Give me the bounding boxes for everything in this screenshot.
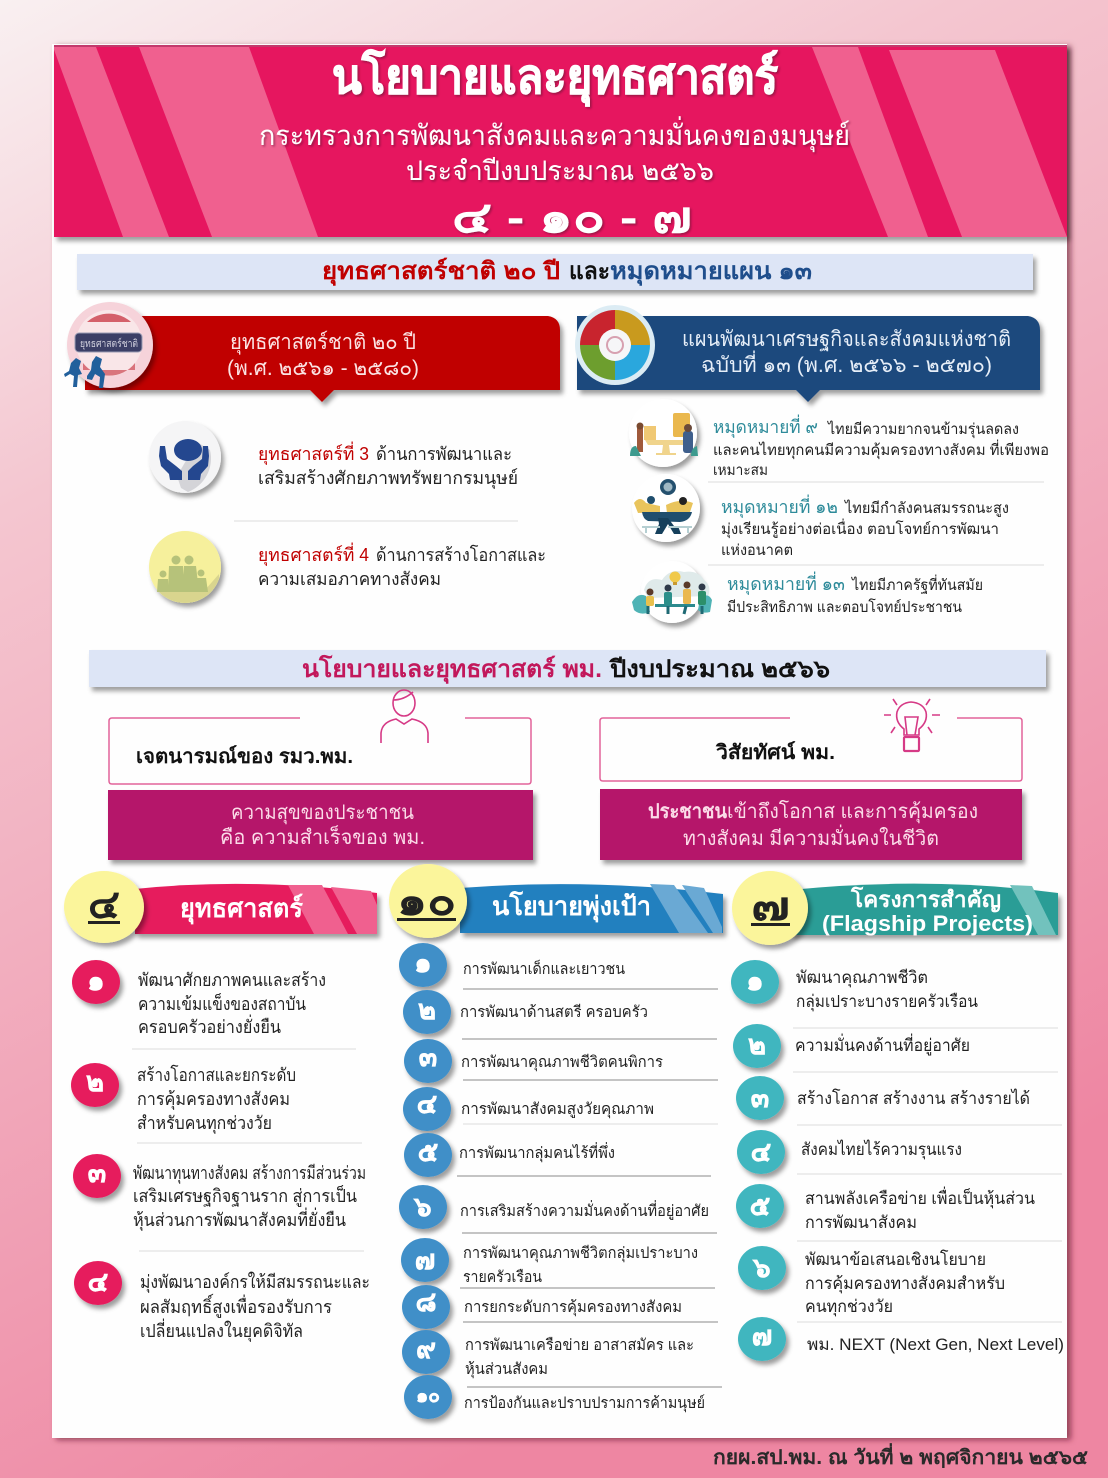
red card: 20-year strategy bbox=[64, 302, 560, 402]
project item 5: สานพลังเครือข่าย เพื่อเป็นหุ้นส่วน bbox=[805, 1186, 1035, 1209]
goal 13: ไทยมีภาครัฐที่ทันสมัย bbox=[851, 574, 983, 594]
icon: team meeting bbox=[632, 561, 712, 623]
policy item 2: ๒ bbox=[418, 995, 436, 1025]
strategy 4: ด้านการสร้างโอกาสและ bbox=[376, 544, 546, 565]
project item 4: สังคมไทยไร้ความรุนแรง bbox=[801, 1139, 962, 1160]
box: vision statement: ประชาชน bbox=[648, 801, 727, 823]
list: target policies bbox=[399, 943, 722, 1419]
strategy 3: เสริมสร้างศักยภาพทรัพยากรมนุษย์ bbox=[258, 468, 518, 489]
icon: puzzle wheel bbox=[575, 305, 655, 385]
goal 9 bbox=[629, 399, 1049, 479]
policy item 4 bbox=[403, 1087, 654, 1131]
policy item 9: ๙ bbox=[416, 1334, 436, 1364]
goal 12: หมุดหมายที่ ๑๒ bbox=[721, 494, 838, 518]
policy item 8: การยกระดับการคุ้มครองทางสังคม bbox=[464, 1299, 682, 1317]
strategy item 2: การคุ้มครองทางสังคม bbox=[137, 1089, 290, 1110]
heading: 7 flagship projects: (Flagship Projects) bbox=[822, 911, 1033, 936]
strategy item 3: พัฒนาทุนทางสังคม สร้างการมีส่วนร่วม bbox=[133, 1163, 366, 1184]
policy item 10 bbox=[404, 1375, 705, 1419]
project item 2: ๒ bbox=[748, 1030, 766, 1060]
blue card: national plan 13: ฉบับที่ ๑๓ (พ.ศ. ๒๕๖๖ - ๒๕๗๐) bbox=[701, 350, 992, 377]
box: happiness statement bbox=[108, 790, 533, 860]
strategy item 4: มุ่งพัฒนาองค์กรให้มีสมรรถนะและ bbox=[140, 1271, 370, 1293]
policy item 1: ๑ bbox=[414, 948, 432, 978]
project item 6: คนทุกช่วงวัย bbox=[805, 1297, 893, 1317]
policy item 4: ๔ bbox=[417, 1089, 437, 1119]
heading: 4 strategies bbox=[64, 871, 377, 943]
panel: ministry vision: วิสัยทัศน์ พม. bbox=[715, 741, 835, 764]
section band: ministry policy: ปีงบประมาณ ๒๕๖๖ bbox=[609, 656, 830, 683]
strategy 4: ยุทธศาสตร์ที่ 4 bbox=[258, 542, 369, 566]
strategy item 4 bbox=[74, 1261, 370, 1342]
panel: minister intent: เจตนารมณ์ของ รมว.พม. bbox=[136, 745, 353, 768]
policy item 7: การพัฒนาคุณภาพชีวิตกลุ่มเปราะบาง bbox=[463, 1245, 698, 1263]
goal 9: เหมาะสม bbox=[713, 462, 768, 479]
strategy item 4: เปลี่ยนแปลงในยุคดิจิทัล bbox=[140, 1318, 303, 1342]
policy item 7 bbox=[401, 1238, 698, 1286]
strategy 4 bbox=[149, 531, 546, 604]
icon: person bbox=[381, 690, 428, 743]
headline numbers: ๔ - ๑๐ - ๗ bbox=[452, 193, 692, 242]
project item 5 bbox=[736, 1184, 1035, 1232]
goal 9: และคนไทยทุกคนมีความคุ้มครองทางสังคม ที่เพียงพอ bbox=[713, 439, 1049, 460]
section band: national strategy: และ bbox=[569, 258, 610, 285]
strategy item 1: ๑ bbox=[87, 966, 105, 996]
subtitle line 1: กระทรวงการพัฒนาสังคมและความมั่นคงของมนุษย์ bbox=[259, 116, 850, 153]
policy item 9 bbox=[402, 1330, 694, 1379]
section band: national strategy: หมุดหมายแผน ๑๓ bbox=[610, 258, 812, 287]
strategy 3: ด้านการพัฒนาและ bbox=[376, 444, 512, 464]
policy item 9: หุ้นส่วนสังคม bbox=[465, 1361, 548, 1379]
project item 6: พัฒนาข้อเสนอเชิงนโยบาย bbox=[805, 1249, 986, 1269]
goal 9: ไทยมีความยากจนข้ามรุ่นลดลง bbox=[827, 420, 1019, 439]
list: flagship projects bbox=[731, 960, 1064, 1361]
strategy 4: ความเสมอภาคทางสังคม bbox=[258, 569, 441, 589]
strategy item 3 bbox=[73, 1154, 366, 1231]
project item 5: ๕ bbox=[750, 1191, 770, 1221]
project item 7: ๗ bbox=[752, 1321, 772, 1351]
title: นโยบายและยุทธศาสตร์ bbox=[332, 48, 778, 107]
policy item 8 bbox=[402, 1285, 682, 1329]
strategy item 2: สร้างโอกาสและยกระดับ bbox=[137, 1064, 296, 1085]
policy item 5 bbox=[404, 1133, 615, 1177]
icon: light bulb bbox=[884, 699, 940, 751]
section band: national strategy bbox=[77, 254, 1033, 290]
project item 3: ๓ bbox=[751, 1083, 769, 1113]
strategy item 3: หุ้นส่วนการพัฒนาสังคมที่ยั่งยืน bbox=[133, 1207, 346, 1231]
strategy item 1: ครอบครัวอย่างยั่งยืน bbox=[138, 1014, 281, 1037]
goal 9: หมุดหมายที่ ๙ bbox=[713, 414, 818, 438]
project item 6: ๖ bbox=[752, 1253, 771, 1283]
policy item 10: การป้องกันและปราบปรามการค้ามนุษย์ bbox=[464, 1394, 705, 1413]
policy item 4: การพัฒนาสังคมสูงวัยคุณภาพ bbox=[461, 1101, 654, 1119]
project item 6: การคุ้มครองทางสังคมสำหรับ bbox=[805, 1274, 1005, 1294]
icon: hands holding bbox=[149, 421, 221, 493]
project item 4: ๔ bbox=[751, 1137, 771, 1167]
strategy item 1: ความเข้มแข็งของสถาบัน bbox=[138, 992, 306, 1014]
heading: 7 flagship projects: ๗ bbox=[751, 885, 790, 929]
policy item 6: ๖ bbox=[413, 1192, 432, 1222]
section band: ministry policy: นโยบายและยุทธศาสตร์ พม. bbox=[302, 654, 602, 685]
policy item 5: ๕ bbox=[418, 1137, 438, 1167]
project item 7: พม. NEXT (Next Gen, Next Level) bbox=[807, 1335, 1064, 1354]
strategy 3 bbox=[149, 421, 518, 493]
panel: minister intent bbox=[109, 690, 531, 784]
list: strategies bbox=[71, 960, 370, 1342]
heading: 4 strategies: ยุทธศาสตร์ bbox=[180, 893, 303, 925]
policy item 1: การพัฒนาเด็กและเยาวชน bbox=[463, 959, 625, 978]
header banner bbox=[53, 45, 1067, 242]
red card: 20-year strategy: ยุทธศาสตร์ชาติ ๒๐ ปี bbox=[230, 330, 416, 355]
icon: learners with clock bbox=[632, 474, 700, 542]
policy item 2 bbox=[403, 990, 648, 1034]
strategy item 2: ๒ bbox=[86, 1067, 104, 1097]
goal 12: แห่งอนาคต bbox=[721, 542, 793, 559]
policy item 6: การเสริมสร้างความมั่นคงด้านที่อยู่อาศัย bbox=[460, 1200, 709, 1221]
strategy item 4: ๔ bbox=[88, 1267, 108, 1297]
goal 12: ไทยมีกำลังคนสมรรถนะสูง bbox=[844, 499, 1009, 517]
project item 4 bbox=[737, 1130, 962, 1174]
icon: Thai flag badge: ยุทธศาสตร์ชาติ bbox=[80, 337, 138, 350]
project item 1: กลุ่มเปราะบางรายครัวเรือน bbox=[796, 992, 978, 1012]
project item 3: สร้างโอกาส สร้างงาน สร้างรายได้ bbox=[797, 1088, 1030, 1108]
panel: ministry vision bbox=[600, 699, 1022, 781]
policy item 10: ๑๐ bbox=[416, 1386, 440, 1407]
icon: balance and coins bbox=[629, 399, 698, 467]
goal 13 bbox=[632, 561, 983, 623]
policy item 1 bbox=[399, 943, 625, 987]
goal 12 bbox=[632, 474, 1009, 559]
policy item 8: ๘ bbox=[416, 1287, 436, 1317]
box: happiness statement: ความสุขของประชาชน bbox=[231, 802, 414, 825]
heading: 7 flagship projects: โครงการสำคัญ bbox=[850, 886, 1001, 913]
goal 13: หมุดหมายที่ ๑๓ bbox=[727, 571, 845, 595]
policy item 7: ๗ bbox=[415, 1245, 435, 1275]
strategy item 2 bbox=[71, 1063, 296, 1134]
strategy 3: ยุทธศาสตร์ที่ 3 bbox=[258, 441, 369, 465]
box: vision statement bbox=[600, 789, 1022, 860]
red card: 20-year strategy: (พ.ศ. ๒๕๖๑ - ๒๕๘๐) bbox=[227, 357, 419, 380]
icon: Thai flag badge bbox=[64, 302, 153, 388]
box: vision statement: ทางสังคม มีความมั่นคงในชีวิต bbox=[683, 824, 939, 850]
strategy item 4: ผลสัมฤทธิ์สูงเพื่อรองรับการ bbox=[140, 1293, 332, 1318]
project item 1 bbox=[731, 960, 978, 1012]
section band: ministry policy bbox=[89, 650, 1046, 687]
policy item 3 bbox=[404, 1039, 663, 1083]
heading: 10 target policies: ๑๐ bbox=[397, 880, 456, 924]
project item 1: พัฒนาคุณภาพชีวิต bbox=[796, 968, 928, 988]
heading: 7 flagship projects bbox=[732, 871, 1058, 945]
policy item 3: ๓ bbox=[419, 1042, 437, 1072]
project item 2: ความมั่นคงด้านที่อยู่อาศัย bbox=[795, 1033, 970, 1056]
goal 13: มีประสิทธิภาพ และตอบโจทย์ประชาชน bbox=[727, 598, 962, 616]
icon: family bbox=[149, 531, 221, 604]
strategy item 1 bbox=[72, 960, 326, 1037]
strategy item 3: ๓ bbox=[88, 1158, 106, 1188]
heading: 4 strategies: ๔ bbox=[88, 883, 120, 927]
blue card: national plan 13: แผนพัฒนาเศรษฐกิจและสังคมแห่งชาติ bbox=[682, 328, 1011, 351]
project item 1: ๑ bbox=[746, 966, 764, 996]
policy item 6 bbox=[399, 1185, 709, 1229]
policy item 2: การพัฒนาด้านสตรี ครอบครัว bbox=[460, 1004, 648, 1021]
project item 5: การพัฒนาสังคม bbox=[805, 1213, 917, 1232]
box: vision statement: เข้าถึงโอกาส และการคุ้มครอง bbox=[727, 800, 978, 824]
policy item 3: การพัฒนาคุณภาพชีวิตคนพิการ bbox=[461, 1054, 663, 1072]
project item 6 bbox=[738, 1246, 1005, 1317]
box: happiness statement: คือ ความสำเร็จของ พม. bbox=[220, 824, 425, 849]
policy item 5: การพัฒนากลุ่มคนไร้ที่พึ่ง bbox=[459, 1142, 615, 1163]
section band: national strategy: ยุทธศาสตร์ชาติ ๒๐ ปี bbox=[322, 257, 560, 287]
footer credit: กยผ.สป.พม. ณ วันที่ ๒ พฤศจิกายน ๒๕๖๕ bbox=[713, 1442, 1088, 1469]
subtitle line 2: ประจำปีงบประมาณ ๒๕๖๖ bbox=[406, 156, 714, 186]
blue card: national plan 13 bbox=[575, 305, 1040, 402]
project item 2 bbox=[733, 1024, 970, 1068]
heading: 10 target policies bbox=[389, 864, 723, 938]
goal 12: มุ่งเรียนรู้อย่างต่อเนื่อง ตอบโจทย์การพัฒนา bbox=[721, 518, 999, 539]
strategy item 3: เสริมเศรษฐกิจฐานราก สู่การเป็น bbox=[133, 1184, 357, 1207]
project item 3 bbox=[736, 1076, 1030, 1120]
project item 7 bbox=[738, 1317, 1064, 1361]
policy item 9: การพัฒนาเครือข่าย อาสาสมัคร และ bbox=[465, 1336, 694, 1354]
policy item 7: รายครัวเรือน bbox=[463, 1268, 542, 1286]
strategy item 2: สำหรับคนทุกช่วงวัย bbox=[137, 1113, 272, 1134]
heading: 10 target policies: นโยบายพุ่งเป้า bbox=[492, 890, 651, 923]
strategy item 1: พัฒนาศักยภาพคนและสร้าง bbox=[138, 970, 326, 990]
